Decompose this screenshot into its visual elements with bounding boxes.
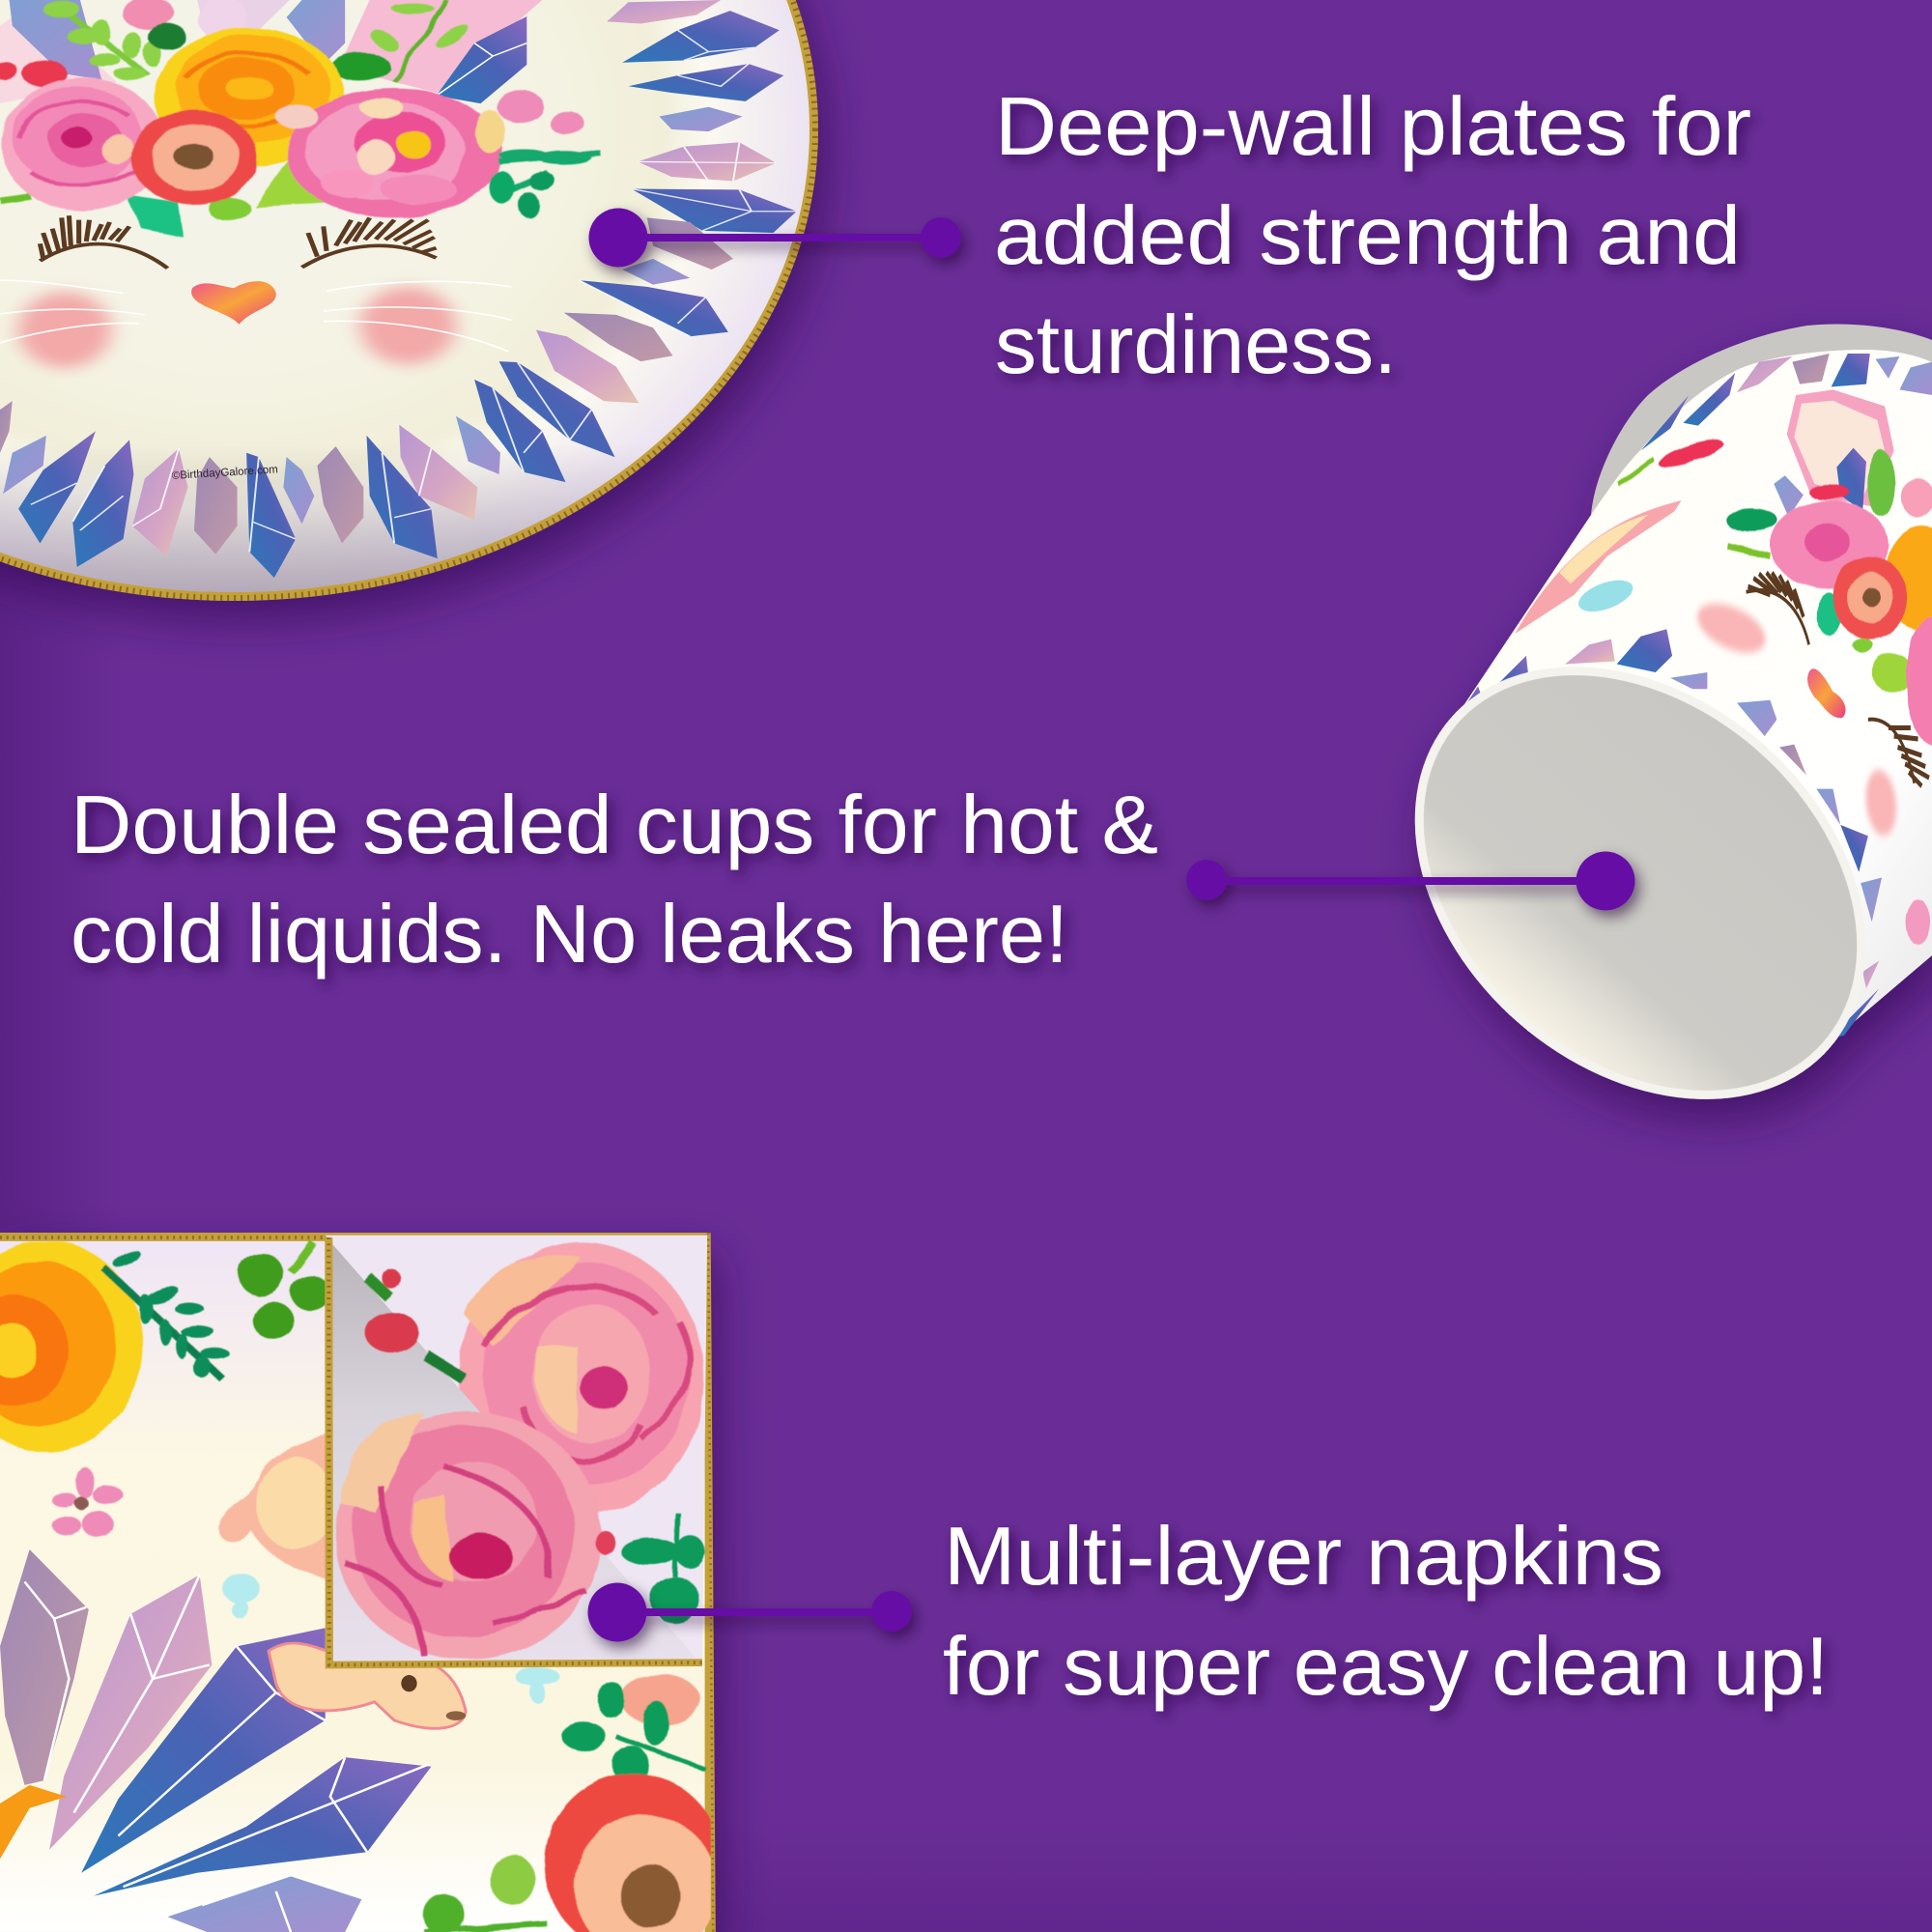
text: plates callout: sturdiness.	[995, 299, 1397, 391]
dark green sprig	[103, 1247, 229, 1378]
crystals	[0, 1549, 431, 1932]
light blue flower	[1577, 574, 1634, 617]
napkin art	[0, 1233, 722, 1932]
green branches	[0, 0, 474, 201]
cup artwork	[1452, 354, 1932, 1038]
text: cups callout	[71, 780, 1158, 980]
light blue flowers	[223, 1574, 560, 1703]
small red flowers	[0, 60, 67, 87]
text: cups callout: cold liquids. No leaks here!	[71, 889, 1068, 980]
whiskers	[0, 280, 511, 352]
floral crown	[0, 0, 601, 238]
text: napkins callout: Multi-layer napkins	[944, 1511, 1663, 1603]
lower right flowers	[423, 1674, 722, 1932]
copyright mark: ©BirthdayGalore.com	[171, 464, 278, 482]
bunny ear print	[1515, 500, 1682, 634]
pink peony	[287, 89, 504, 217]
connector: cup	[1186, 852, 1634, 910]
bunny body	[218, 1433, 326, 1579]
flap rose	[335, 1411, 601, 1660]
cup silhouette and rim	[1329, 324, 1932, 1187]
green sprig	[490, 149, 601, 217]
napkin print	[0, 1240, 722, 1932]
clover	[239, 1242, 330, 1339]
cup eyelashes	[1747, 573, 1929, 786]
unicorn ear	[1787, 389, 1894, 506]
small pink flowers	[497, 90, 584, 135]
pink rose	[2, 77, 164, 212]
flowers and leaves	[0, 1240, 560, 1703]
orange wedge	[0, 1785, 67, 1859]
panel: paper plate	[0, 0, 818, 601]
cup nose	[1807, 668, 1846, 718]
cup base	[1329, 579, 1932, 1187]
leaves	[127, 195, 184, 238]
cup side wall	[1449, 350, 1932, 1049]
panel: napkin	[0, 1233, 722, 1932]
plate body	[0, 0, 818, 601]
text: plates callout	[994, 81, 1751, 391]
text: napkins callout: for super easy clean up!	[943, 1621, 1829, 1713]
text: plates callout: Deep-wall plates for	[995, 81, 1751, 173]
flower cluster	[1619, 435, 1932, 944]
text: plates callout: added strength and	[994, 190, 1741, 282]
callout connectors	[587, 209, 1634, 1642]
folded flap	[326, 1244, 702, 1665]
plate artwork	[0, 0, 797, 578]
text: cups callout: Double sealed cups for hot &	[71, 780, 1158, 871]
napkin back layer	[326, 1236, 707, 1665]
connector: plate	[589, 209, 961, 267]
flap gold edges	[328, 1237, 702, 1665]
pink flower	[51, 1466, 124, 1537]
connector: napkin	[587, 1582, 912, 1642]
cup cheeks	[1693, 594, 1900, 839]
napkin sheet	[0, 1233, 713, 1932]
red poppy	[131, 110, 257, 205]
orange rose	[0, 1240, 143, 1452]
yellow rose	[154, 28, 345, 166]
cup crystals	[1452, 354, 1932, 1038]
cheeks	[17, 287, 456, 368]
bunny head	[269, 1643, 466, 1728]
crown crystals and ears	[0, 0, 542, 103]
eyelashes	[40, 215, 437, 269]
panel: paper cup	[1329, 324, 1932, 1187]
napkin paper	[0, 1240, 705, 1932]
nose	[191, 281, 276, 325]
crystal ring	[0, 0, 797, 578]
upper rose and leaves	[458, 1242, 705, 1623]
text: napkins callout	[943, 1511, 1829, 1713]
